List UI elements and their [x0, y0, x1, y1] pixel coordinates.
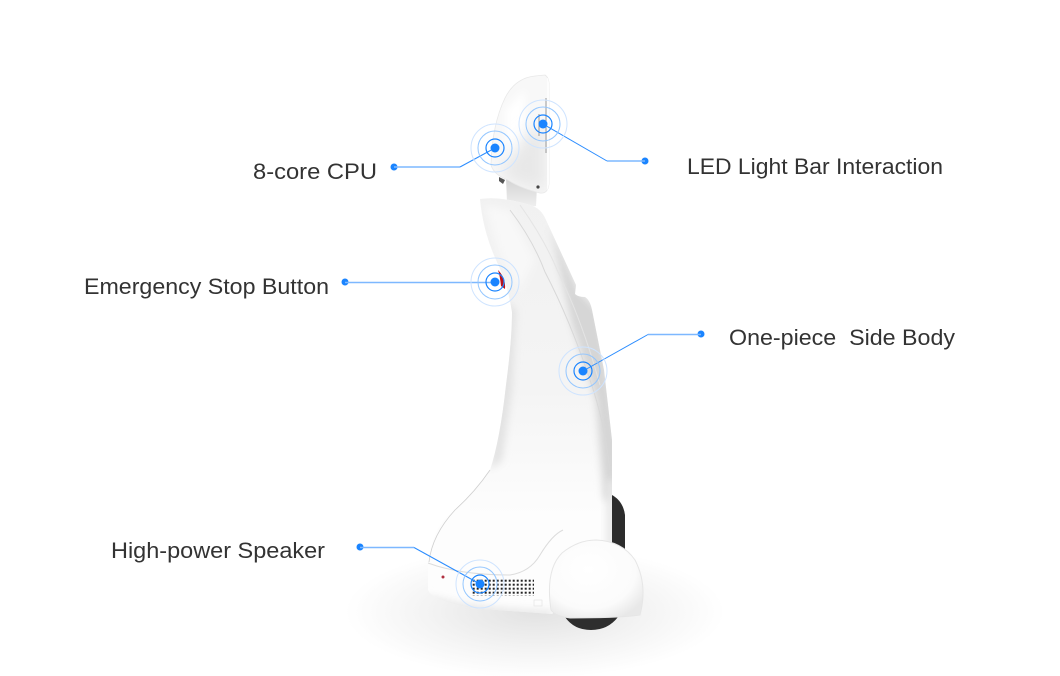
- rear lower shading: [606, 481, 612, 542]
- rear wheel cover: [549, 540, 643, 618]
- mid body tone: [480, 198, 590, 400]
- label: LED Light Bar Interaction: LED Light Bar Interaction: [687, 154, 943, 179]
- robot body: [428, 195, 620, 618]
- shoulder tone: [484, 205, 535, 290]
- robot illustration: [428, 75, 643, 630]
- label: LED Light Bar Interaction: [519, 100, 943, 179]
- camera mark: [536, 185, 540, 189]
- label: 8-core CPU: [253, 124, 519, 184]
- robot neck: [506, 178, 537, 206]
- label: High-power Speaker: [111, 538, 504, 608]
- body side seam: [510, 210, 610, 470]
- rear edge shading: [554, 240, 612, 500]
- label: High-power Speaker: High-power Speaker: [111, 538, 325, 563]
- base underside shading: [435, 596, 552, 614]
- label: One-piece Side Body: [559, 325, 955, 395]
- rear camera: [499, 177, 505, 184]
- label: Emergency Stop Button: Emergency Stop Button: [84, 274, 329, 299]
- port labels: [534, 600, 542, 606]
- floor shadow: [345, 546, 725, 676]
- head shade: [505, 133, 545, 188]
- base indicator: [442, 576, 444, 578]
- face rim: [547, 78, 549, 190]
- robot head: [491, 75, 550, 193]
- base seam: [428, 530, 563, 575]
- head highlight: [505, 90, 525, 165]
- label: One-piece Side Body: One-piece Side Body: [729, 325, 955, 350]
- drive wheel tire: [565, 617, 618, 630]
- LED bars: [539, 98, 546, 153]
- label: Emergency Stop Button: [84, 258, 519, 306]
- rear dark panel: [610, 494, 625, 552]
- speaker grille: [472, 579, 534, 596]
- emergency stop button: [498, 270, 505, 289]
- label: 8-core CPU: 8-core CPU: [253, 159, 377, 184]
- front edge shading: [492, 306, 516, 466]
